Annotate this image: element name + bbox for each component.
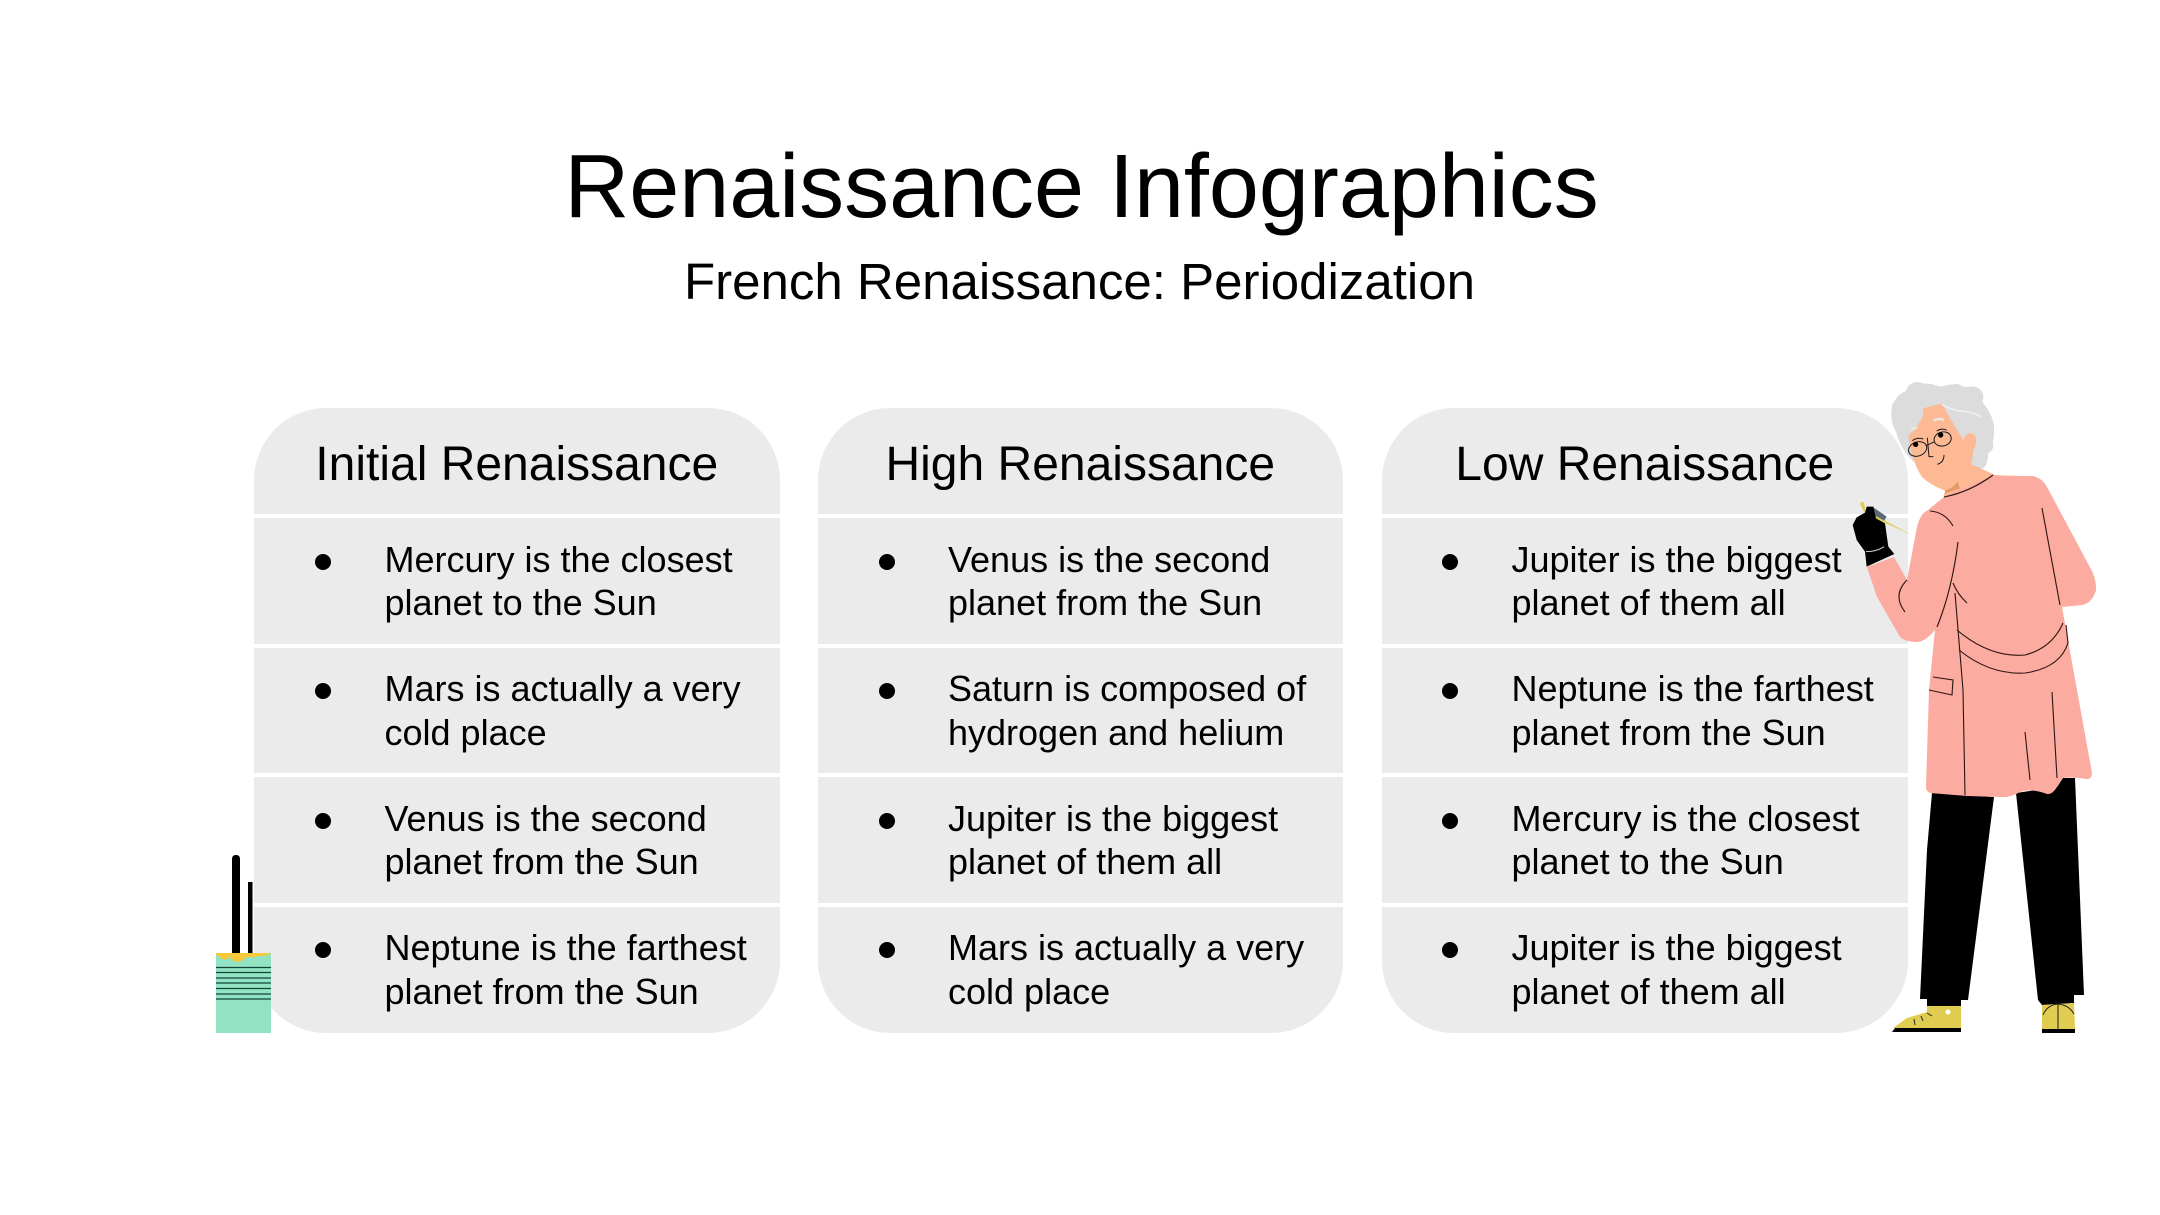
list item: Jupiter: Jupiter is the biggest bbox=[1512, 539, 1842, 580]
list item: Jupiter: planet of them all bbox=[1512, 970, 1786, 1012]
list item: Saturn bbox=[818, 648, 1343, 773]
panel: Low Renaissance bbox=[1382, 408, 1908, 1033]
list item: Venus: Venus is the second bbox=[384, 798, 707, 839]
list item: Neptune bbox=[1382, 648, 1908, 773]
list item: Jupiter: Jupiter is the biggest bbox=[1512, 927, 1842, 968]
panel: High Renaissance bbox=[818, 408, 1343, 1033]
list item: Venus: planet from the Sun bbox=[948, 582, 1262, 623]
subtitle: French Renaissance: Periodization bbox=[684, 253, 1475, 310]
heading: Initial Renaissance bbox=[254, 408, 780, 514]
trousers bbox=[1920, 778, 2084, 1007]
list item: Neptune: planet from the Sun bbox=[384, 970, 699, 1012]
glasses and features bbox=[1906, 429, 1953, 464]
pencil bbox=[1860, 502, 1912, 535]
heading: Low Renaissance bbox=[1382, 408, 1908, 514]
list item: Jupiter: Jupiter is the biggest bbox=[948, 798, 1278, 839]
illustration: woman in pink coat bbox=[1853, 382, 2096, 1033]
hair highlight bbox=[1942, 404, 1982, 417]
list item: Mars: Mars is actually a very bbox=[948, 927, 1304, 968]
list item: Neptune: Neptune is the farthest bbox=[1512, 668, 1874, 709]
list item: Mars: cold place bbox=[384, 712, 547, 752]
heading: High Renaissance: High Renaissance bbox=[885, 438, 1275, 491]
list item: Mercury bbox=[1382, 777, 1908, 902]
list item: Jupiter: planet of them all bbox=[1512, 582, 1786, 623]
list item: Venus: Venus is the second bbox=[948, 539, 1270, 580]
list item: Mercury bbox=[254, 518, 780, 644]
list item: Venus bbox=[254, 777, 780, 902]
list item: Mars: cold place bbox=[948, 970, 1110, 1012]
heading: High Renaissance bbox=[818, 408, 1343, 514]
icon: jar with paintbrushes bbox=[216, 855, 271, 1033]
list item: Mercury: planet to the Sun bbox=[1512, 841, 1784, 882]
list item: Jupiter bbox=[1382, 906, 1908, 1033]
face and neck bbox=[1908, 403, 1995, 498]
heading: Initial Renaissance: Initial Renaissance bbox=[315, 438, 718, 491]
list item: Neptune bbox=[254, 906, 780, 1033]
coat bbox=[1867, 475, 2096, 797]
list item: Mercury: Mercury is the closest bbox=[384, 539, 733, 580]
list item: Saturn: hydrogen and helium bbox=[948, 712, 1284, 752]
list item: Mercury: planet to the Sun bbox=[384, 582, 657, 623]
list item: Jupiter bbox=[1382, 518, 1908, 644]
list item: Mercury: Mercury is the closest bbox=[1512, 798, 1860, 839]
list item: Venus: planet from the Sun bbox=[384, 841, 699, 882]
hair bbox=[1891, 382, 1994, 468]
list item: Neptune: Neptune is the farthest bbox=[384, 927, 747, 968]
title: Renaissance Infographics bbox=[564, 137, 1599, 237]
glove bbox=[1853, 507, 1894, 567]
list item: Mars: Mars is actually a very bbox=[384, 668, 741, 709]
shoes bbox=[1893, 1003, 2075, 1029]
list item: Venus bbox=[818, 518, 1343, 644]
list item: Saturn: Saturn is composed of bbox=[948, 668, 1306, 709]
head bbox=[1891, 382, 1995, 498]
list item: Neptune: planet from the Sun bbox=[1512, 712, 1826, 752]
coat creases bbox=[1899, 475, 2068, 795]
list item: Jupiter bbox=[818, 777, 1343, 902]
list item: Mars bbox=[254, 648, 780, 773]
heading: Low Renaissance: Low Renaissance bbox=[1455, 438, 1834, 491]
panel: Initial Renaissance bbox=[254, 408, 780, 1033]
list item: Mars bbox=[818, 906, 1343, 1033]
list item: Jupiter: planet of them all bbox=[948, 841, 1222, 882]
